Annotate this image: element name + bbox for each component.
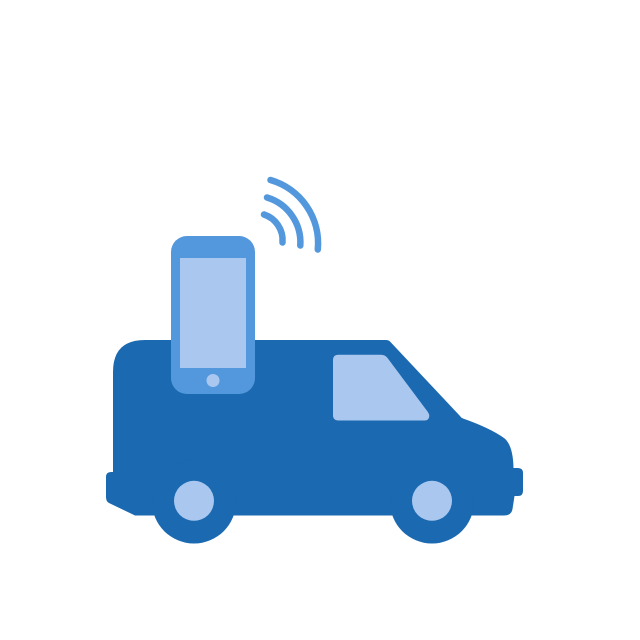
van [106,340,523,544]
home button [206,374,220,387]
smartphone icon [171,236,255,394]
wifi signal arcs [264,180,318,250]
front wheel [390,460,474,544]
phone body [171,236,255,394]
van body [106,340,523,516]
rear wheel [152,460,236,544]
phone screen [180,258,246,368]
van window [333,355,429,420]
